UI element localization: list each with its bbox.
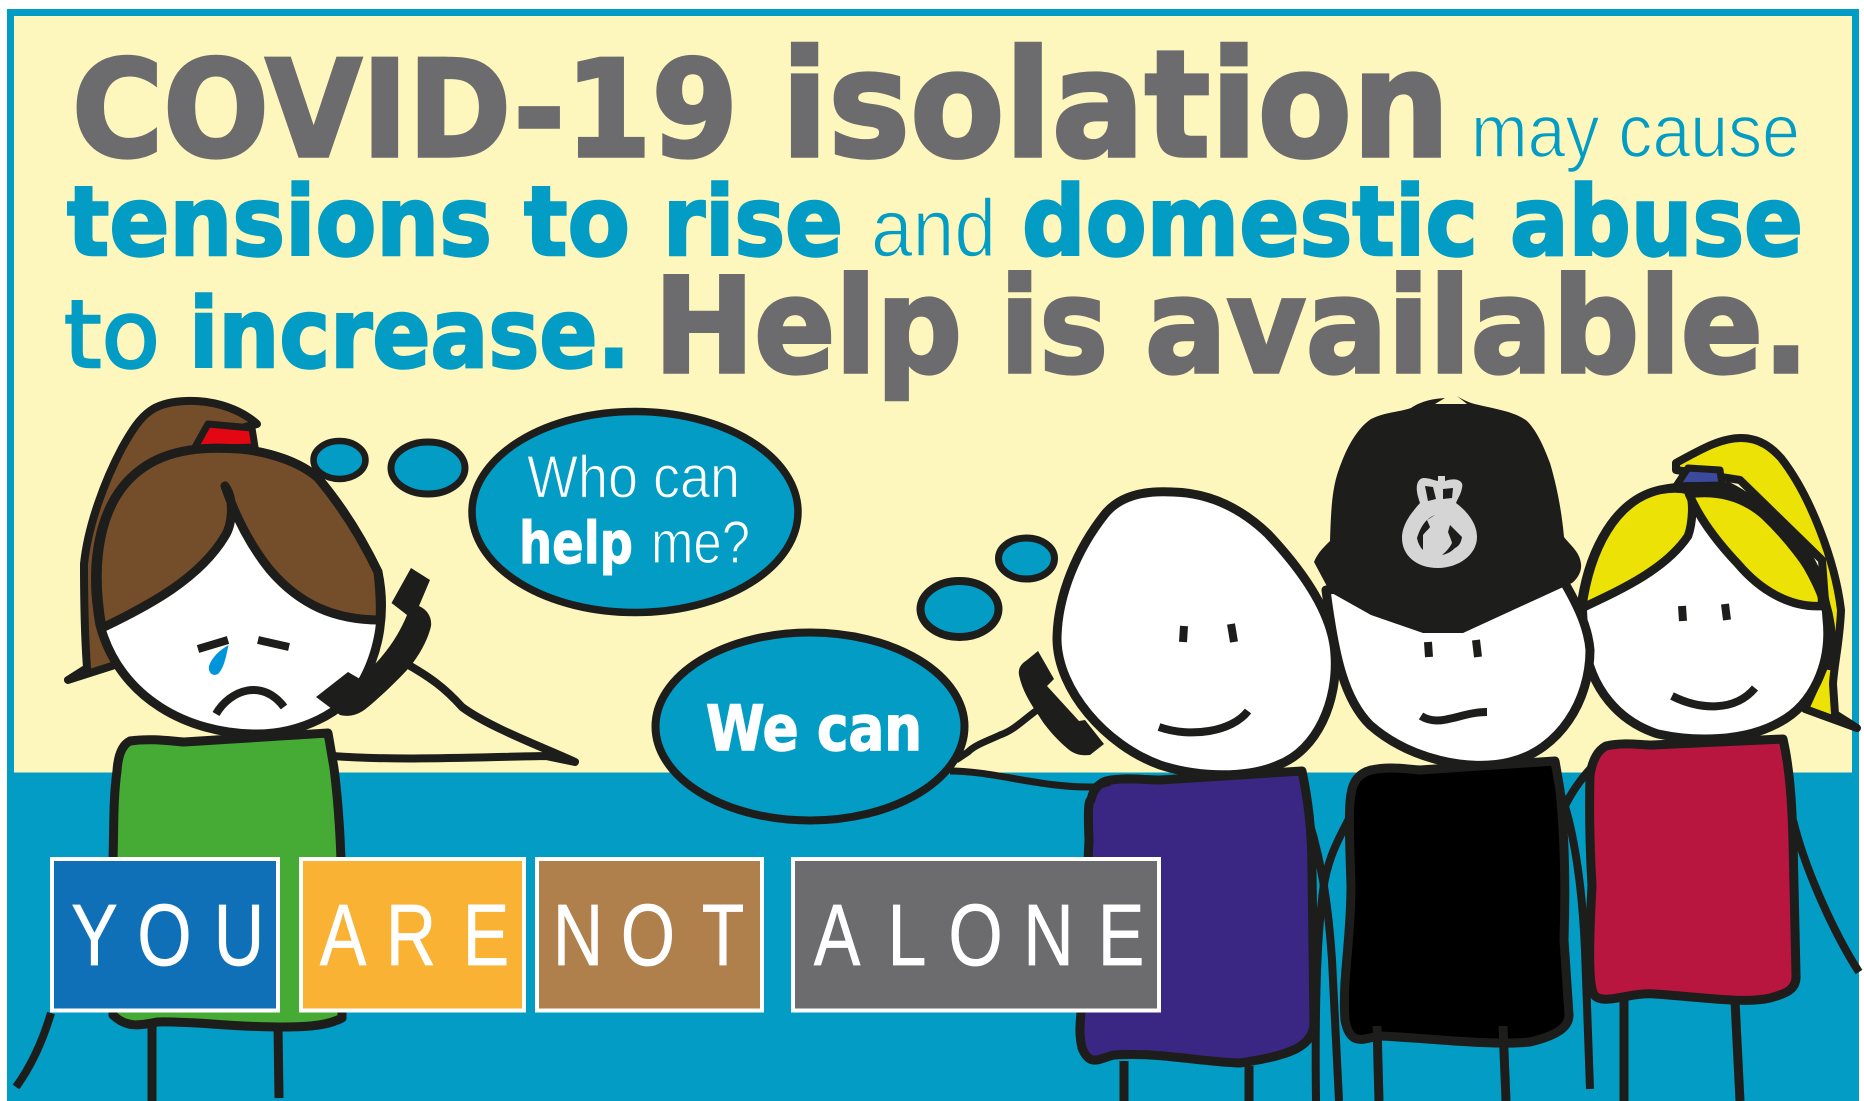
hair fringe: [97, 448, 380, 628]
box: ARE: ARE: [320, 887, 509, 984]
text: to: to: [524, 166, 630, 278]
smile: [1159, 711, 1248, 732]
purple body: [1080, 771, 1314, 1063]
green body: [113, 733, 342, 1027]
text: help: help: [519, 509, 633, 577]
banner: YOU ARE NOT ALONE: [52, 859, 1159, 1010]
box: ALONE: ALONE: [814, 887, 1144, 984]
text: to: to: [64, 281, 160, 390]
head: [1057, 492, 1335, 775]
head: [1582, 487, 1828, 739]
hair side strand: [1724, 485, 1831, 670]
ponytail: [68, 401, 257, 680]
figure: blonde woman: [1564, 438, 1859, 1101]
eyes: [1183, 624, 1234, 642]
box: NOT: [537, 859, 762, 1010]
crimson body: [1590, 739, 1796, 1000]
telephone handset: [1019, 651, 1104, 755]
box: ALONE: [793, 859, 1159, 1010]
telephone handset: [316, 568, 431, 716]
speech bubble: Who can help me?: [472, 412, 798, 612]
hair fringe: [1582, 488, 1692, 608]
left arm: [1564, 767, 1592, 808]
box: YOU: [52, 859, 278, 1010]
heading: COVID-19: COVID-19: [72, 32, 738, 188]
box: ARE: [301, 859, 524, 1010]
text: Who can: Who can: [527, 444, 740, 510]
small bubble: [998, 538, 1054, 579]
hair band: [1676, 468, 1722, 486]
right arm: [1793, 820, 1859, 972]
heading: isolation: isolation: [781, 19, 1450, 191]
hat badge: [1402, 476, 1477, 568]
figure: police officer: [1314, 396, 1590, 1101]
eyes: [1428, 640, 1478, 657]
sad mouth: [216, 690, 284, 714]
text: abuse: abuse: [1510, 166, 1803, 278]
medium bubble: [920, 581, 998, 637]
legs: [1124, 1061, 1249, 1101]
box: YOU: YOU: [71, 887, 264, 984]
legs: [152, 1024, 279, 1101]
eyes: [1682, 604, 1727, 621]
figure: man on phone: [950, 492, 1339, 1101]
legs: [1377, 1026, 1506, 1101]
head: [96, 448, 381, 734]
small bubble: [314, 441, 366, 479]
box: NOT: NOT: [553, 887, 744, 984]
thought bubbles: right figure: [656, 538, 1054, 820]
heading: is: is: [1000, 250, 1108, 404]
text: and: and: [871, 183, 996, 274]
text: domestic: domestic: [1022, 166, 1478, 278]
text: rise: rise: [663, 166, 843, 278]
figure: woman with ponytail on phone: [16, 401, 575, 1101]
text: tensions: tensions: [67, 166, 492, 278]
arm reaching to phone: [950, 708, 1110, 787]
heading: available.: available.: [1145, 250, 1809, 404]
head: [1326, 575, 1590, 765]
arm on phone side: [332, 663, 575, 762]
legs: [1624, 998, 1740, 1101]
black body: [1344, 761, 1569, 1043]
heading: Help: Help: [654, 250, 962, 404]
right arm: [1555, 780, 1590, 1089]
medium bubble: [391, 442, 465, 494]
thought bubbles: left figure: [314, 412, 798, 612]
arm lower left: [16, 1013, 51, 1087]
police hat: [1314, 396, 1581, 633]
text: We can: We can: [706, 692, 922, 765]
ponytail: [1676, 438, 1857, 728]
text: may cause: may cause: [1471, 89, 1800, 173]
hair band: [194, 424, 255, 449]
eyes: [198, 640, 289, 649]
right arm: [1302, 800, 1339, 1101]
smile: [1672, 688, 1755, 706]
tear drop: [209, 645, 228, 675]
left arm: [1316, 817, 1350, 1101]
text: me?: me?: [651, 509, 750, 576]
flat mouth: [1421, 712, 1487, 720]
speech bubble: We can: [656, 632, 964, 820]
text: increase.: increase.: [189, 278, 630, 390]
title: headline text: [64, 19, 1809, 404]
